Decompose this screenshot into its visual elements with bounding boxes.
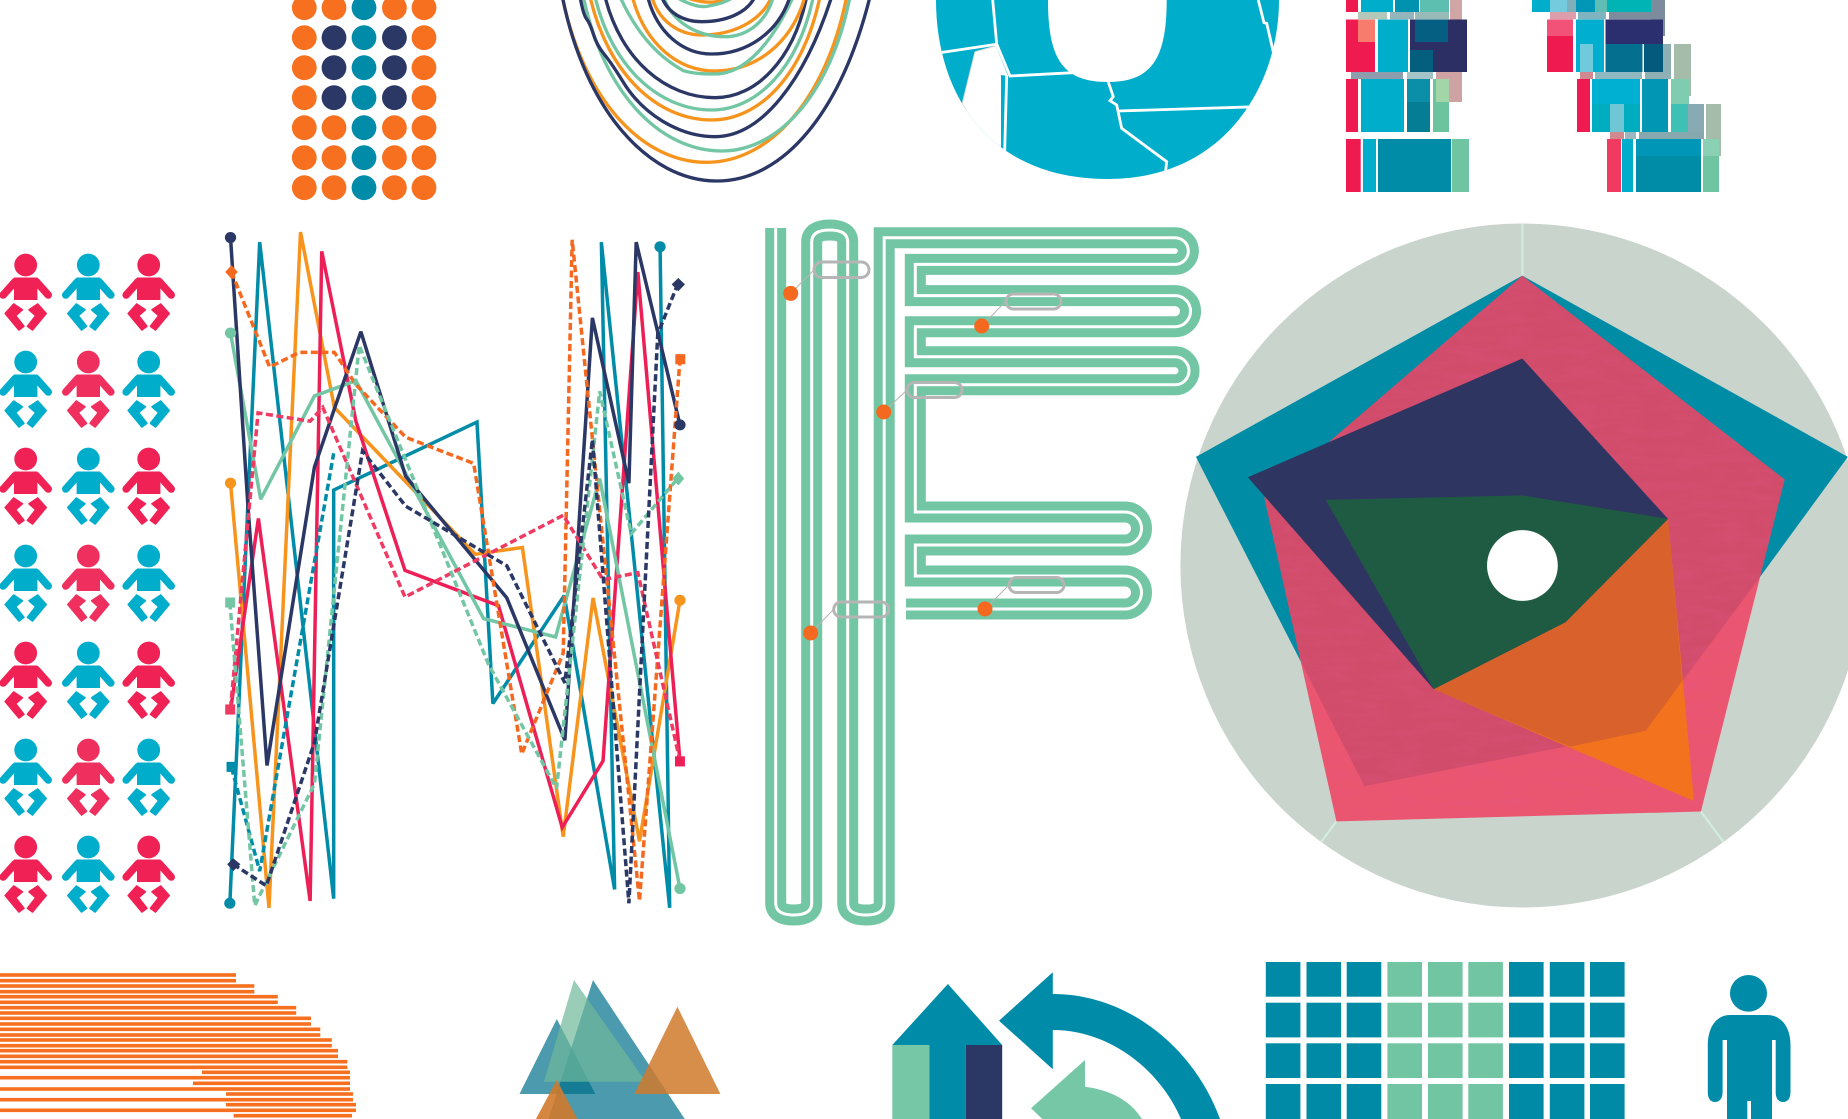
concentric contour curves <box>562 0 870 181</box>
treemap letter left <box>1346 0 1469 192</box>
icon: person <box>1708 975 1790 1119</box>
baby pictogram grid <box>3 254 171 912</box>
overlapping triangles <box>520 980 720 1119</box>
multi-series line chart letter N <box>224 232 686 909</box>
dot matrix chart <box>292 0 436 200</box>
striped orange half-disc <box>0 973 356 1118</box>
radar chart <box>1180 224 1848 908</box>
treemap letter right <box>1532 0 1721 192</box>
ribbon letters IF <box>776 228 1191 915</box>
icon: curved return arrows <box>999 972 1220 1119</box>
annotation callouts <box>783 262 1064 640</box>
icon: three-part up arrow <box>892 984 1002 1119</box>
map letter U <box>936 0 1279 179</box>
block grid chart <box>1266 962 1625 1119</box>
